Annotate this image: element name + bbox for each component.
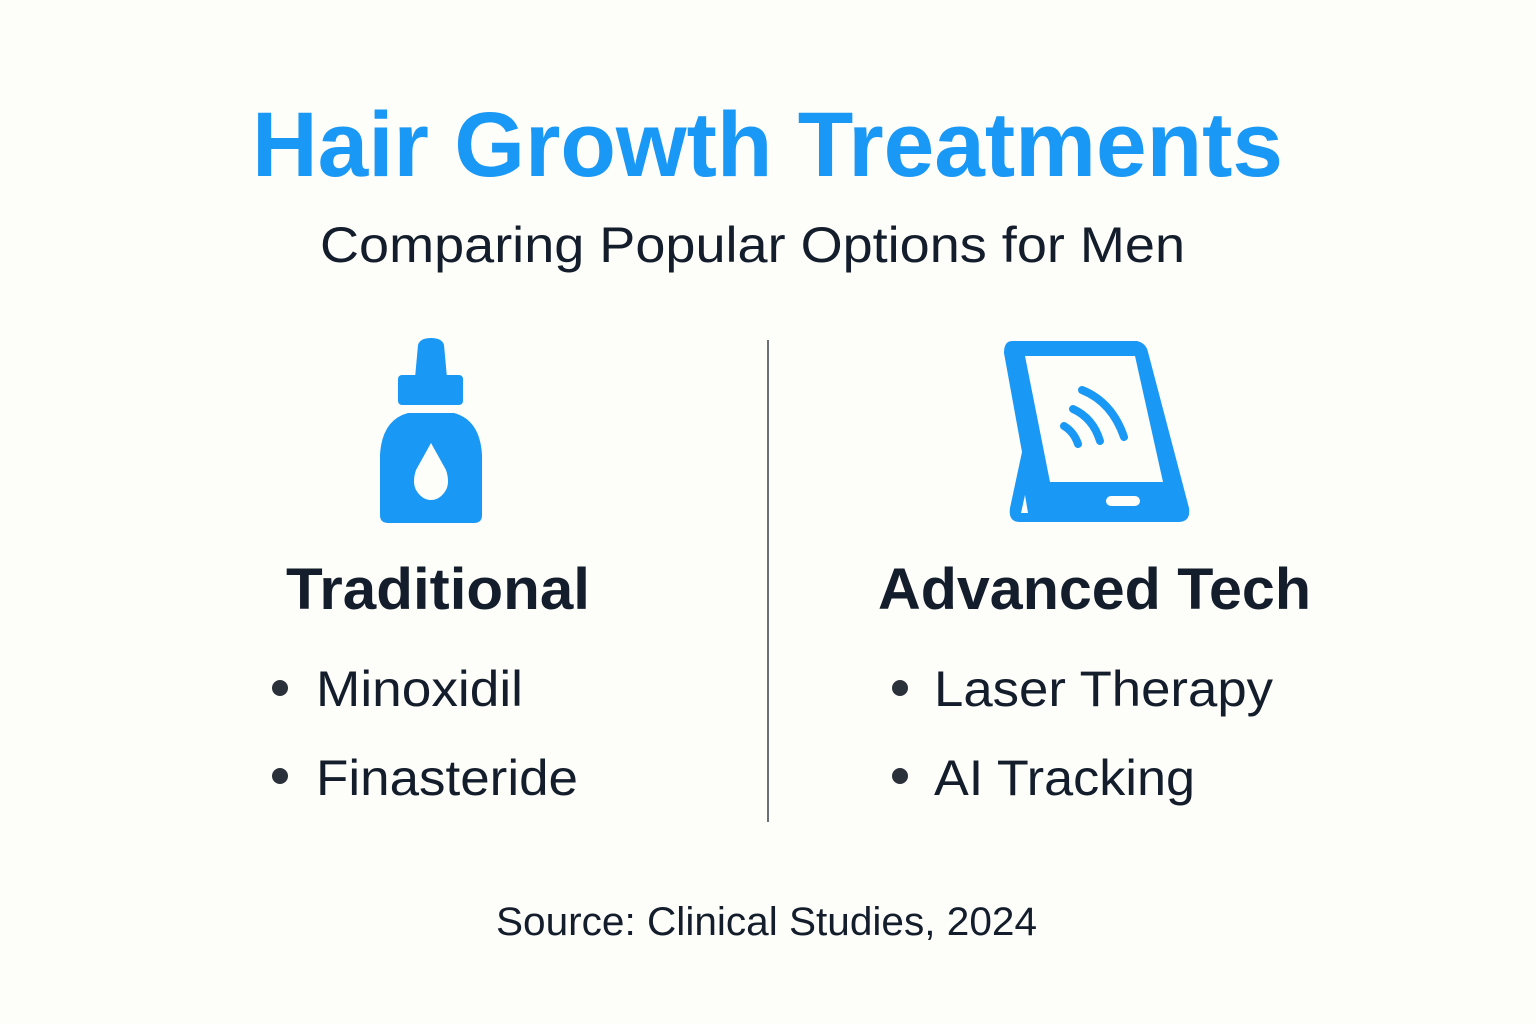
list: traditional: Minoxidil (316, 661, 523, 717)
list: traditional: Finasteride (316, 750, 578, 806)
subtitle: Comparing Popular Options for Men (320, 217, 1185, 273)
source: Source: Clinical Studies, 2024 (496, 900, 1037, 944)
list: traditional (272, 661, 578, 806)
icon: laser tablet (1004, 341, 1189, 522)
heading: Traditional: Traditional (286, 557, 590, 622)
list: advanced (892, 661, 1273, 806)
heading: Advanced Tech: Advanced Tech (878, 557, 1311, 622)
icon: dropper bottle (380, 338, 482, 523)
list: advanced: Laser Therapy (934, 661, 1273, 717)
divider (767, 340, 769, 822)
title: Hair Growth Treatments (252, 94, 1283, 196)
list: advanced: AI Tracking (934, 750, 1195, 806)
